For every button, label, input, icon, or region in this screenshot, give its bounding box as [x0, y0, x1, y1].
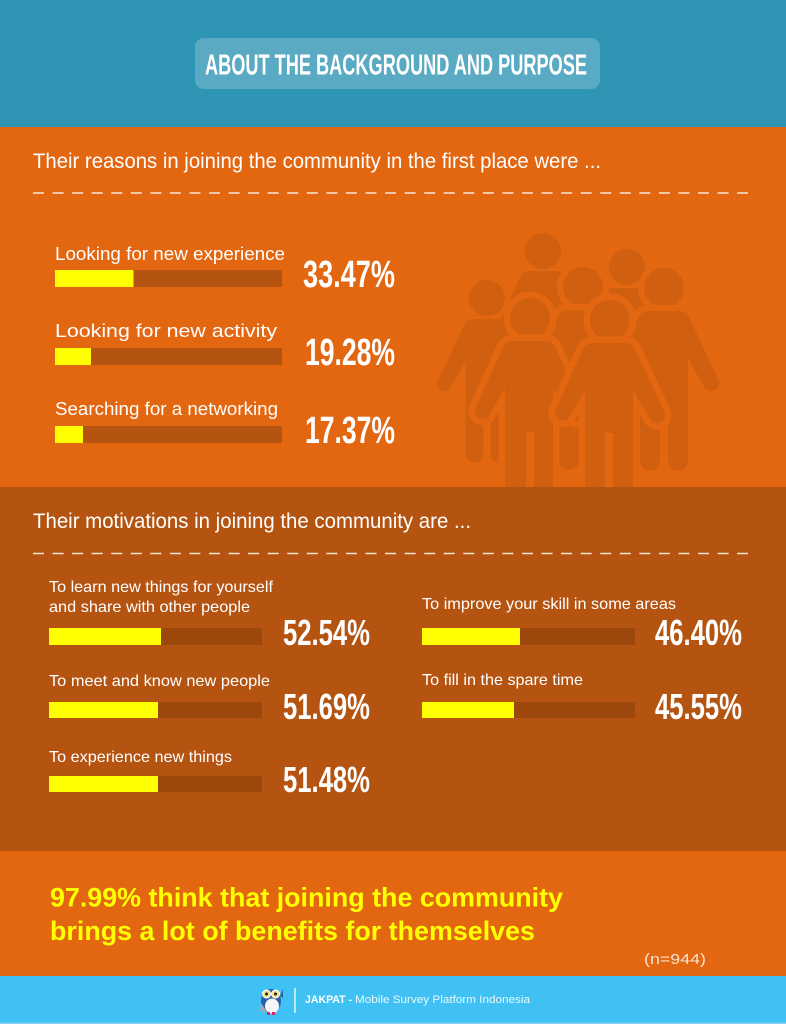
sample size: (n=944) — [644, 951, 706, 968]
reason: networking: 17.37% — [305, 410, 395, 452]
panel: reasons for joining — [0, 127, 786, 500]
reason: new activity: Looking for new activity — [55, 321, 277, 341]
reason: new activity — [55, 321, 395, 374]
footer band — [0, 976, 786, 1024]
reason: new experience: 33.47% — [303, 254, 395, 296]
motivation: new things: To experience new things — [49, 749, 232, 766]
motivation: new things: 51.48% — [283, 759, 370, 800]
reason: new experience — [55, 244, 395, 296]
motivation: learn new things: 52.54% — [283, 612, 370, 653]
motivation: learn new things: and share with other people — [49, 599, 250, 616]
panel: benefits callout — [0, 851, 786, 976]
motivation: spare time — [422, 672, 742, 727]
callout text — [50, 882, 563, 946]
footer text: Mobile Survey Platform Indonesia — [355, 994, 531, 1006]
title box — [195, 38, 600, 89]
motivation: new things — [49, 749, 370, 800]
motivation: learn new things — [49, 579, 370, 653]
motivations heading: Their motivations in joining the community are ... — [33, 510, 471, 533]
icon: group of people — [437, 233, 719, 500]
motivation: improve skill — [422, 596, 742, 653]
motivation: learn new things: To learn new things for yourself — [49, 579, 274, 596]
reason: networking: Searching for a networking — [55, 399, 278, 419]
reason: networking — [55, 399, 395, 452]
motivation: meet new people — [49, 673, 370, 727]
reasons heading: Their reasons in joining the community in the first place were ... — [33, 150, 601, 173]
motivation: meet new people: 51.69% — [283, 686, 370, 727]
motivation: meet new people: To meet and know new people — [49, 673, 270, 690]
callout text: brings a lot of benefits for themselves — [50, 916, 535, 946]
motivation: improve skill: 46.40% — [655, 612, 742, 653]
motivation: spare time: 45.55% — [655, 686, 742, 727]
header band — [0, 0, 786, 127]
reason: new experience: Looking for new experience — [55, 244, 285, 264]
footer text: JAKPAT - — [305, 994, 352, 1006]
icon: owl logo — [260, 989, 283, 1015]
motivation: improve skill: To improve your skill in some areas — [422, 596, 676, 613]
callout text: 97.99% think that joining the community — [50, 882, 563, 912]
panel: motivations — [0, 487, 786, 851]
motivation: spare time: To fill in the spare time — [422, 672, 583, 689]
reason: new activity: 19.28% — [305, 332, 395, 374]
